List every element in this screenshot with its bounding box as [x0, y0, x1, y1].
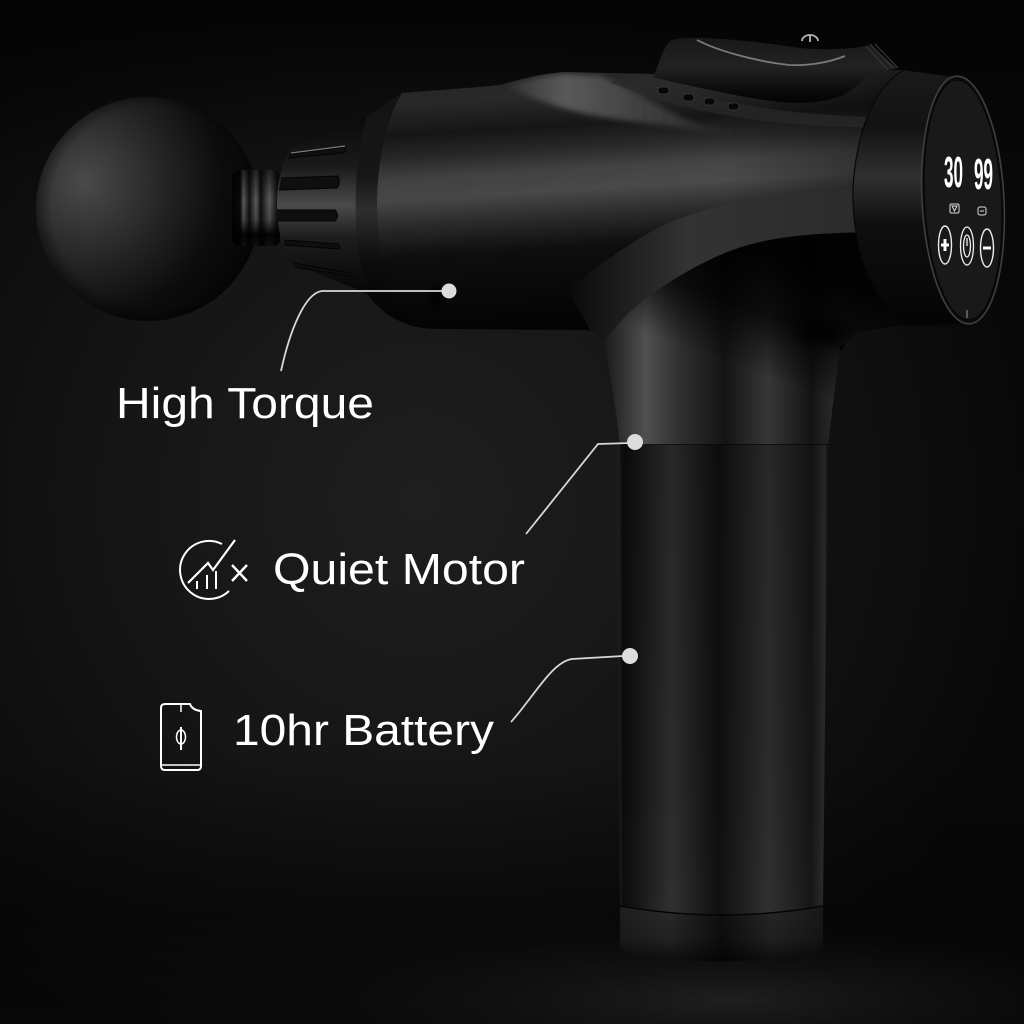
callout: battery: [161, 648, 638, 770]
button ledge: [610, 81, 866, 127]
massage ball head: [36, 97, 260, 321]
quiet motor leader line: [526, 443, 630, 534]
plus button: [938, 226, 952, 264]
high torque label: High Torque: [116, 379, 374, 428]
minus button: [980, 229, 994, 267]
display tick: [966, 310, 968, 318]
top highlight: [512, 72, 706, 130]
top grip: [653, 38, 898, 103]
small shadow near dot: [426, 279, 446, 315]
body barrel and upper handle: [370, 60, 910, 446]
quiet motor label: Quiet Motor: [273, 545, 525, 594]
quiet motor dot: [627, 434, 643, 450]
handle base cap: [620, 906, 823, 962]
neck connector: [232, 170, 280, 246]
battery dot: [622, 648, 638, 664]
motor head housing: [853, 70, 968, 325]
high torque dot: [442, 284, 456, 298]
callout: high torque: [116, 284, 456, 428]
battery leader line: [511, 656, 623, 722]
power button: [960, 227, 974, 265]
swoosh band: [580, 194, 856, 344]
upper handle: [600, 232, 905, 446]
handle lower section: [617, 444, 828, 915]
product: massage gun: 99: [974, 150, 993, 199]
front ring: [356, 93, 417, 327]
collar: [277, 117, 368, 294]
pinch shadow: [788, 312, 856, 352]
callout: quiet motor: [180, 434, 643, 599]
mode icon: [950, 204, 959, 213]
battery small icon: [978, 207, 986, 215]
icon: battery: [161, 704, 201, 770]
grip ring: [802, 35, 818, 42]
touch display panel: [916, 74, 1010, 326]
high torque leader line: [281, 291, 442, 371]
product: massage gun: 30: [944, 148, 963, 197]
battery label: 10hr Battery: [233, 706, 494, 755]
icon: noise chart crossed: [180, 540, 247, 599]
grip dots: [658, 87, 739, 110]
